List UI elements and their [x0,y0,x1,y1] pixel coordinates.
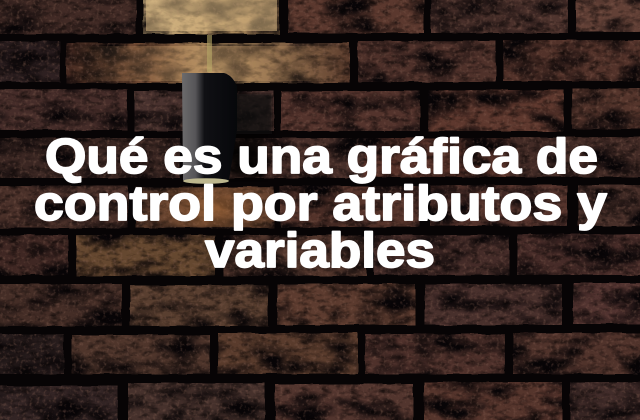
lamp body [182,73,237,180]
course 2 [0,40,640,83]
title line 1: Qué es una gráfica de [45,130,598,184]
course 4 [0,137,640,178]
course 5 [0,185,640,228]
title [34,130,607,278]
lit second course highlight [72,46,348,81]
course 7 [0,283,640,326]
lamp bottom rim [183,178,229,184]
lamp shadow on wall [228,94,272,178]
lamp stem light [207,35,212,72]
title line 3: variables [205,224,435,278]
course 9 [0,382,640,420]
course 3 [0,88,640,131]
course 6 [0,234,640,276]
lit top brick highlight [146,0,277,31]
course 8 [0,333,640,374]
lit brick below lamp [150,188,272,227]
wall lamp [182,35,237,184]
course 1 [0,0,640,34]
title line 2: control por atributos y [34,177,607,231]
